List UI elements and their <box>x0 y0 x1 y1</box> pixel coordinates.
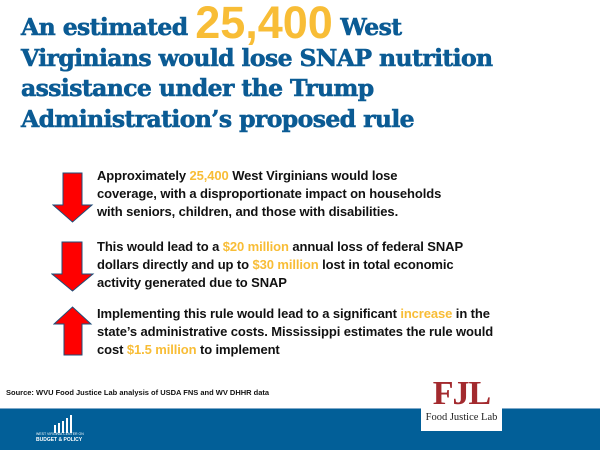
text block 1: Approximately 25,400 West Virginians would lose <box>97 168 397 183</box>
text block 1 <box>97 168 441 219</box>
text block 2: activity generated due to SNAP <box>97 275 287 290</box>
icon: up arrow <box>53 306 92 356</box>
text block 3: Implementing this rule would lead to a significant increase in the <box>97 306 490 321</box>
text block 1: with seniors, children, and those with disabilities. <box>97 204 398 219</box>
icon: down arrow 2 <box>51 242 94 292</box>
text block 1: coverage, with a disproportionate impact on households <box>97 186 441 201</box>
source note: Source: WVU Food Justice Lab analysis of USDA FNS and WV DHHR data <box>6 388 269 397</box>
text block 2: dollars directly and up to $30 million lost in total economic <box>97 257 454 272</box>
footer band <box>0 408 600 450</box>
title: Virginians would lose SNAP nutrition <box>21 44 493 72</box>
title <box>20 0 493 132</box>
logo: WV Center on Budget & Policy <box>36 415 84 443</box>
text block 3: cost $1.5 million to implement <box>97 342 280 357</box>
title: assistance under the Trump <box>21 74 374 102</box>
logo: Food Justice Lab: FJL <box>433 375 490 412</box>
logo: WV Center on Budget & Policy: WEST VIRGINIA CENTER ON <box>36 432 84 436</box>
logo: WV Center on Budget & Policy: BUDGET & POLICY <box>36 437 82 443</box>
title: Administration’s proposed rule <box>21 104 414 132</box>
logo: Food Justice Lab: Food Justice Lab <box>426 412 497 423</box>
icon: down arrow 1 <box>52 172 94 223</box>
text block 3 <box>97 306 493 357</box>
text block 3: state’s administrative costs. Mississippi estimates the rule would <box>97 324 493 339</box>
text block 2 <box>97 239 463 290</box>
text block 2: This would lead to a $20 million annual loss of federal SNAP <box>97 239 463 254</box>
logo: Food Justice Lab <box>421 376 502 431</box>
